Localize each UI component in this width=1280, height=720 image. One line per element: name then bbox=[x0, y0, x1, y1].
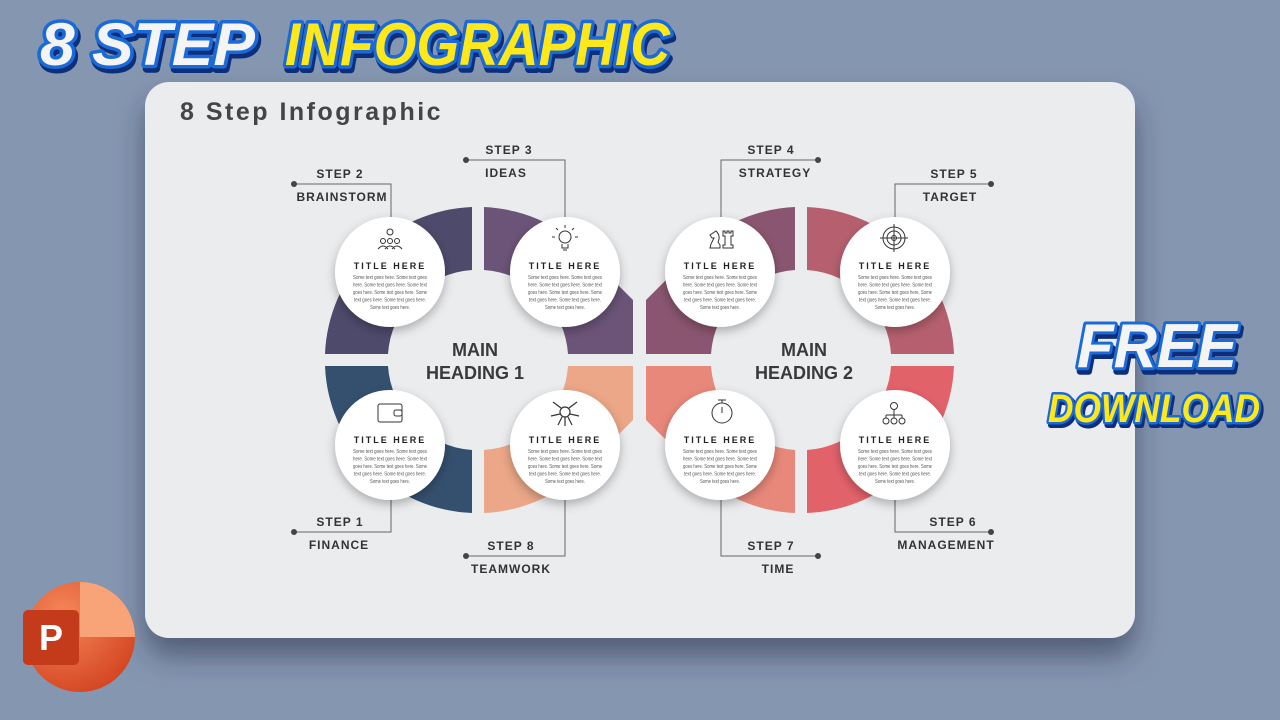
circle: step 1 finance: goes here. Some text goes here. Some bbox=[353, 464, 427, 470]
main heading 2: HEADING 2 bbox=[755, 363, 853, 383]
circle: step 4 strategy: here. Some text goes here. Some text bbox=[683, 282, 757, 288]
top title: 8 STEP INFOGRAPHIC: INFOGRAPHIC bbox=[285, 11, 672, 78]
step labels: STEP 2 bbox=[316, 167, 364, 181]
step labels: STEP 5 bbox=[930, 167, 978, 181]
step labels: STEP 1 bbox=[316, 515, 364, 529]
step labels bbox=[296, 143, 995, 576]
step labels: TIME bbox=[762, 562, 794, 576]
free download badge bbox=[1048, 312, 1262, 434]
step labels: STRATEGY bbox=[739, 166, 811, 180]
circle: step 3 ideas bbox=[510, 217, 620, 327]
circle: step 4 strategy: TITLE HERE bbox=[684, 261, 756, 271]
connector lines bbox=[294, 160, 991, 556]
circle: step 5 target: Some text goes here. Some text goes bbox=[858, 275, 932, 281]
icon: powerpoint logo: P bbox=[39, 617, 63, 658]
circle: step 2 brainstorm: goes here. Some text goes here. Some bbox=[353, 290, 427, 296]
icon: chess pieces bbox=[710, 231, 733, 248]
step labels: TEAMWORK bbox=[471, 562, 551, 576]
circle: step 2 brainstorm: Some text goes here. Some text goes bbox=[353, 275, 427, 281]
circle: step 4 strategy bbox=[665, 217, 775, 327]
step labels: STEP 6 bbox=[929, 515, 977, 529]
main heading 1: MAIN bbox=[452, 340, 498, 360]
circle: step 4 strategy: text goes here. Some text goes here. bbox=[684, 298, 756, 304]
card panel bbox=[145, 82, 1135, 638]
top title: 8 STEP INFOGRAPHIC: 8 STEP bbox=[40, 11, 256, 78]
ring 2 segments bbox=[646, 207, 954, 513]
circle: step 7 time: TITLE HERE bbox=[684, 435, 756, 445]
card heading: 8 Step Infographic bbox=[180, 98, 443, 126]
step labels: STEP 3 bbox=[485, 143, 533, 157]
circle: step 5 target: here. Some text goes here. Some text bbox=[858, 282, 932, 288]
ring 1 segments bbox=[325, 207, 633, 513]
circle: step 6 management: goes here. Some text goes here. Some bbox=[858, 464, 932, 470]
circle: step 1 finance: Some text goes here. bbox=[370, 479, 410, 485]
circle: step 7 time bbox=[665, 390, 775, 500]
circle: step 3 ideas: text goes here. Some text goes here. bbox=[529, 298, 601, 304]
circle: step 6 management bbox=[840, 390, 950, 500]
top title: 8 STEP INFOGRAPHIC bbox=[40, 11, 674, 82]
circle: step 2 brainstorm: text goes here. Some text goes here. bbox=[354, 298, 426, 304]
circle: step 7 time: here. Some text goes here. Some text bbox=[683, 456, 757, 462]
step labels: MANAGEMENT bbox=[897, 538, 995, 552]
circle: step 3 ideas: TITLE HERE bbox=[529, 261, 601, 271]
top title: 8 STEP INFOGRAPHIC: 8 STEP bbox=[42, 15, 258, 82]
circle: step 7 time: goes here. Some text goes here. Some bbox=[683, 464, 757, 470]
icon: wallet bbox=[378, 404, 402, 422]
circle: step 3 ideas: here. Some text goes here. Some text bbox=[528, 282, 602, 288]
icon: people with pin bbox=[378, 229, 402, 249]
circle: step 3 ideas: goes here. Some text goes here. Some bbox=[528, 290, 602, 296]
circle: step 1 finance: Some text goes here. Some text goes bbox=[353, 449, 427, 455]
circle: step 8 teamwork: Some text goes here. bbox=[545, 479, 585, 485]
icon: target bbox=[880, 224, 908, 252]
circle: step 6 management: TITLE HERE bbox=[859, 435, 931, 445]
circle: step 4 strategy: Some text goes here. bbox=[700, 305, 740, 311]
circle: step 5 target: Some text goes here. bbox=[875, 305, 915, 311]
icon: hands together bbox=[551, 402, 579, 426]
step labels: TARGET bbox=[923, 190, 977, 204]
step labels: STEP 7 bbox=[747, 539, 795, 553]
icon: light bulb bbox=[552, 225, 578, 250]
circle: step 8 teamwork: text goes here. Some text goes here. bbox=[529, 472, 601, 478]
circle: step 2 brainstorm: Some text goes here. bbox=[370, 305, 410, 311]
circle: step 8 teamwork: goes here. Some text goes here. Some bbox=[528, 464, 602, 470]
circle: step 1 finance: TITLE HERE bbox=[354, 435, 426, 445]
icon: powerpoint logo bbox=[23, 582, 135, 692]
top title: 8 STEP INFOGRAPHIC: INFOGRAPHIC bbox=[287, 15, 674, 82]
circle: step 5 target bbox=[840, 217, 950, 327]
circle: step 6 management: here. Some text goes here. Some text bbox=[858, 456, 932, 462]
circle: step 2 brainstorm: here. Some text goes here. Some text bbox=[353, 282, 427, 288]
icon: stopwatch bbox=[712, 400, 732, 423]
circle: step 8 teamwork: TITLE HERE bbox=[529, 435, 601, 445]
circle: step 3 ideas: Some text goes here. Some text goes bbox=[528, 275, 602, 281]
circle: step 8 teamwork: here. Some text goes here. Some text bbox=[528, 456, 602, 462]
circle: step 1 finance bbox=[335, 390, 445, 500]
circle: step 8 teamwork: Some text goes here. Some text goes bbox=[528, 449, 602, 455]
free download badge: FREE bbox=[1077, 312, 1239, 381]
step labels: IDEAS bbox=[485, 166, 527, 180]
step labels: STEP 4 bbox=[747, 143, 795, 157]
circle: step 2 brainstorm: TITLE HERE bbox=[354, 261, 426, 271]
circle: step 7 time: text goes here. Some text goes here. bbox=[684, 472, 756, 478]
circle: step 7 time: Some text goes here. bbox=[700, 479, 740, 485]
circle: step 5 target: TITLE HERE bbox=[859, 261, 931, 271]
circle: step 6 management: Some text goes here. Some text goes bbox=[858, 449, 932, 455]
circle: step 7 time: Some text goes here. Some text goes bbox=[683, 449, 757, 455]
circle: step 5 target: goes here. Some text goes here. Some bbox=[858, 290, 932, 296]
circle: step 4 strategy: goes here. Some text goes here. Some bbox=[683, 290, 757, 296]
main heading 1: HEADING 1 bbox=[426, 363, 524, 383]
step labels: FINANCE bbox=[309, 538, 369, 552]
circle: step 2 brainstorm bbox=[335, 217, 445, 327]
step labels: BRAINSTORM bbox=[296, 190, 388, 204]
free download badge: FREE bbox=[1079, 316, 1241, 385]
circle: step 5 target: text goes here. Some text goes here. bbox=[859, 298, 931, 304]
circle: step 3 ideas: Some text goes here. bbox=[545, 305, 585, 311]
circle: step 6 management: text goes here. Some text goes here. bbox=[859, 472, 931, 478]
main heading 2: MAIN bbox=[781, 340, 827, 360]
circle: step 4 strategy: Some text goes here. Some text goes bbox=[683, 275, 757, 281]
circle: step 6 management: Some text goes here. bbox=[875, 479, 915, 485]
circle: step 1 finance: text goes here. Some text goes here. bbox=[354, 472, 426, 478]
icon: org chart bbox=[883, 402, 905, 424]
step labels: STEP 8 bbox=[487, 539, 535, 553]
circle: step 8 teamwork bbox=[510, 390, 620, 500]
circle: step 1 finance: here. Some text goes here. Some text bbox=[353, 456, 427, 462]
